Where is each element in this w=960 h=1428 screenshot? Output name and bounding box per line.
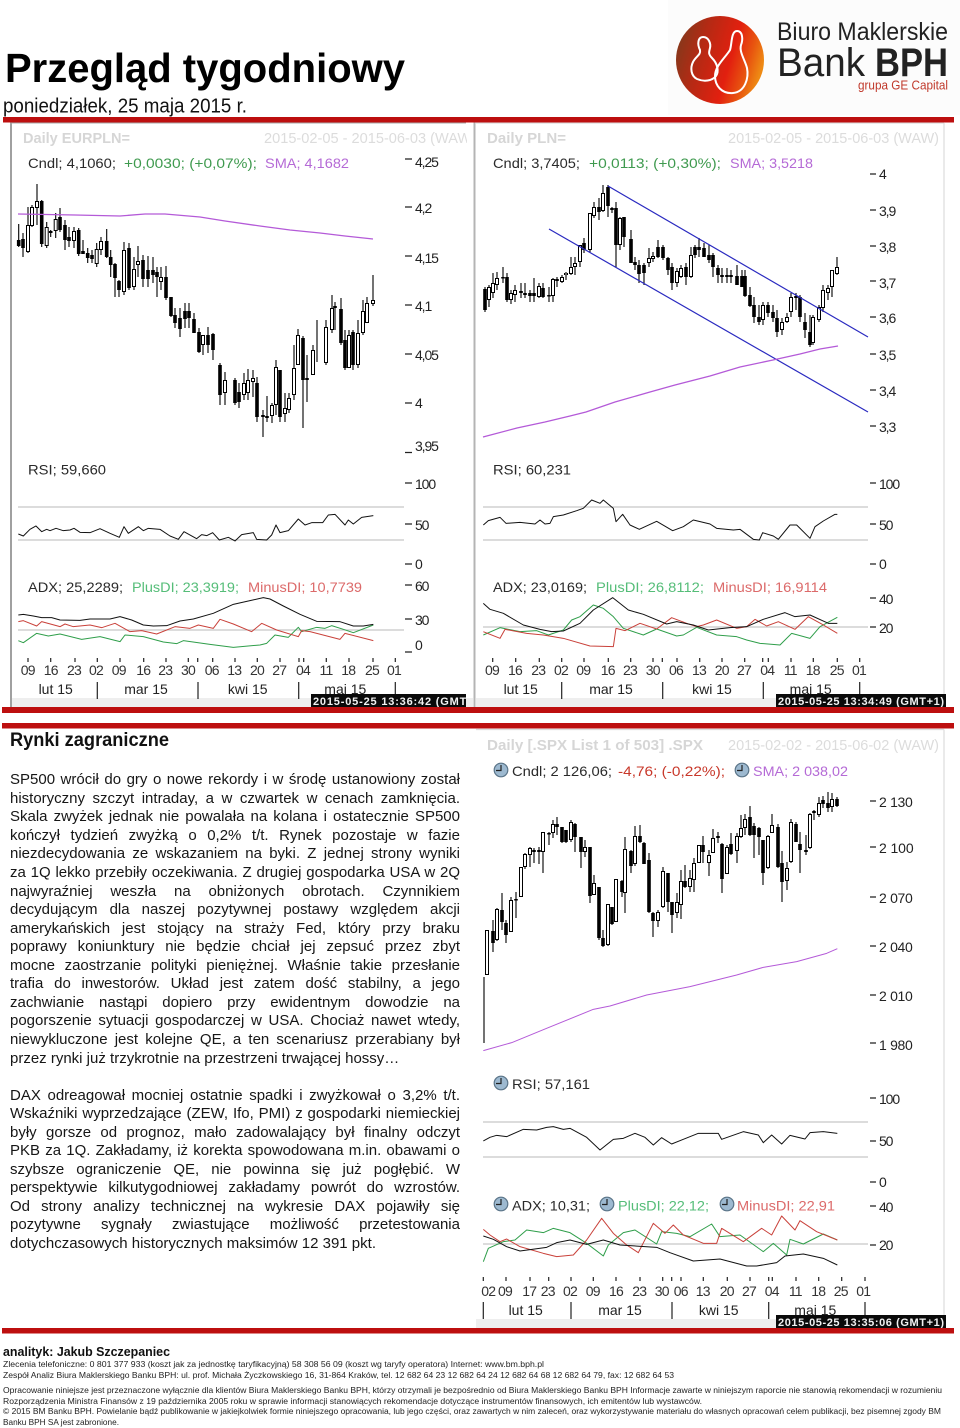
time axis: lut 15 bbox=[39, 681, 73, 697]
panel: PLN chart bbox=[476, 122, 946, 708]
y axis labels bbox=[870, 794, 914, 1253]
legend: price: Cndl; 4,1060; bbox=[28, 155, 116, 171]
text block: SP500 commentary: zachwianie nastąpi dopiero przy ewidentnym dowodzie na bbox=[10, 994, 460, 1011]
y axis labels: 20 bbox=[879, 620, 894, 636]
text block: DAX commentary: Wskaźniki wyprzedzające (ZEW, Ifo, PMI) z gospodarki niemieckiej bbox=[10, 1105, 460, 1122]
time axis: kwi 15 bbox=[228, 681, 268, 697]
time axis: 09 bbox=[21, 662, 36, 678]
time axis: 06 bbox=[674, 1283, 689, 1299]
time axis: 20 bbox=[720, 1283, 735, 1299]
time axis: 20 bbox=[250, 662, 265, 678]
time axis: maj 15 bbox=[790, 681, 832, 697]
y axis labels: 50 bbox=[879, 517, 894, 533]
time axis bbox=[485, 658, 867, 699]
time axis: 30 bbox=[655, 1283, 670, 1299]
time axis: kwi 15 bbox=[699, 1302, 739, 1318]
time axis: 13 bbox=[227, 662, 242, 678]
legend: price: Cndl; 2 126,06; bbox=[512, 763, 612, 779]
time axis: 16 bbox=[609, 1283, 624, 1299]
y axis labels: 20 bbox=[879, 1237, 894, 1253]
logo: Biuro Maklerskie Bank BPH: Biuro Maklerskie bbox=[777, 18, 948, 46]
RSI panel bbox=[483, 1076, 868, 1157]
text block: SP500 commentary: trafia do inwestorów. Układ jest zatem dość stabilny, a jego bbox=[10, 975, 460, 992]
time axis: 16 bbox=[136, 662, 151, 678]
ADX panel: ADX; 25,2289; bbox=[28, 579, 123, 595]
text block: SP500 commentary: pogorszenie sytuacji gospodarczej w USA. Chociaż nawet wtedy, bbox=[10, 1012, 460, 1029]
y axis labels: 4,15 bbox=[415, 250, 439, 266]
red divider top bbox=[3, 117, 954, 122]
text block: SP500 commentary: amerykańskich jest stojący na straży Fed, który przy braku bbox=[10, 920, 460, 937]
time axis: 23 bbox=[158, 662, 173, 678]
y axis labels: 0 bbox=[415, 637, 423, 653]
candlestick chart bbox=[18, 184, 373, 437]
text block: SP500 commentary: najwyraźniej weszła na obniżonych obrotach. Czynnikiem bbox=[10, 883, 460, 900]
chart header: 2015-02-05 - 2015-06-03 (WAW) bbox=[264, 131, 476, 147]
y axis labels: 2 040 bbox=[879, 939, 913, 955]
panel: SPX chart bbox=[476, 730, 946, 1329]
legend: price bbox=[493, 155, 813, 171]
time axis: 27 bbox=[737, 662, 752, 678]
time axis: 27 bbox=[272, 662, 287, 678]
time axis: 09 bbox=[112, 662, 127, 678]
red divider bottom bbox=[2, 1328, 954, 1334]
time axis: 09 bbox=[586, 1283, 601, 1299]
ADX panel: PlusDI; 23,3919; bbox=[132, 579, 239, 595]
time axis: 04 bbox=[765, 1283, 780, 1299]
time axis: 25 bbox=[834, 1283, 849, 1299]
title: Przegląd tygodniowy bbox=[5, 45, 405, 91]
time axis: 06 bbox=[205, 662, 220, 678]
time axis: 23 bbox=[623, 662, 638, 678]
text block: SP500 commentary: niewykluczone jest kolejne QE, a ten scenariusz przerabiany był bbox=[10, 1031, 460, 1048]
time axis: lut 15 bbox=[504, 681, 538, 697]
disclaimer: © 2015 BM Banku BPH. Powielanie bądź publikowanie w jakiejkolwiek formie niniejszego opracowania, lub jego części, oraz zawartych w nim zaleceń, oraz wykorzystywanie materiału do własnych opracowań celem publikacji, bez pisemnej zgody BM bbox=[3, 1406, 941, 1416]
time axis: 09 bbox=[576, 662, 591, 678]
RSI panel: RSI; 60,231 bbox=[493, 462, 571, 478]
time axis: lut 15 bbox=[509, 1302, 543, 1318]
text block: SP500 commentary: historyczny szczyt intraday, a w czwartek w cenach zamknięcia. bbox=[10, 790, 460, 807]
y axis labels bbox=[870, 166, 900, 636]
red divider middle lower bbox=[2, 723, 954, 728]
time axis: 27 bbox=[742, 1283, 757, 1299]
text block: SP500 commentary: za 1Q lekko przebiły oczekiwania. Z drugiej gospodarka USA w 2Q bbox=[10, 864, 460, 881]
text block: SP500 commentary: Skala zwyżek jednak nie powalała na kolana i ostatecznie SP500 bbox=[10, 808, 460, 825]
date subtitle: poniedziałek, 25 maja 2015 r. bbox=[3, 96, 247, 118]
text block: DAX commentary: Od strony analizy technicznej na wykresie DAX pojawiły się bbox=[10, 1198, 460, 1215]
time axis: 16 bbox=[601, 662, 616, 678]
y axis labels: 2 010 bbox=[879, 988, 913, 1004]
y axis labels: 2 070 bbox=[879, 890, 913, 906]
text block: SP500 commentary: poprawy koniunktury nie będzie chciał jej zepsuć przez zbyt bbox=[10, 938, 460, 955]
RSI panel bbox=[483, 462, 868, 540]
time axis: 23 bbox=[632, 1283, 647, 1299]
text block: DAX commentary: PKB za 1Q. Zakładamy, iż korekta spowodowana m.in. obawami o bbox=[10, 1142, 460, 1159]
y axis labels: 100 bbox=[879, 1091, 900, 1107]
y axis labels: 4,2 bbox=[415, 200, 432, 216]
y axis labels: 50 bbox=[415, 517, 430, 533]
red divider middle upper bbox=[2, 707, 954, 713]
ADX panel bbox=[483, 1197, 868, 1266]
legend: price: Cndl; 3,7405; bbox=[493, 155, 580, 171]
time axis: 18 bbox=[341, 662, 356, 678]
time axis: kwi 15 bbox=[692, 681, 732, 697]
y axis labels: 3,4 bbox=[879, 383, 896, 399]
time axis: 11 bbox=[320, 662, 333, 678]
time axis: 20 bbox=[715, 662, 730, 678]
legend: price: +0,0113; (+0,30%); bbox=[589, 155, 721, 171]
y axis labels: 3,3 bbox=[879, 419, 896, 435]
time axis: 16 bbox=[44, 662, 59, 678]
text block: SP500 commentary: SP500 wrócił do gry o nowe rekordy i w środę ustanowiony został bbox=[10, 771, 460, 788]
legend: price: SMA; 3,5218 bbox=[730, 155, 813, 171]
time axis: 02 bbox=[554, 662, 569, 678]
y axis labels: 3,6 bbox=[879, 310, 896, 326]
time axis: 18 bbox=[806, 662, 821, 678]
time axis: mar 15 bbox=[589, 681, 633, 697]
y axis labels: 100 bbox=[415, 476, 436, 492]
ADX panel: ADX; 23,0169; bbox=[493, 579, 587, 595]
logo: Biuro Maklerskie Bank BPH bbox=[668, 0, 960, 115]
time axis: mar 15 bbox=[598, 1302, 642, 1318]
time axis: 02 bbox=[481, 1283, 496, 1299]
disclaimer: Opracowanie niniejsze jest przeznaczone wyłącznie dla klientów Biura Maklerskiego Banku BPH, którzy otrzymali je bezpośrednio od Biura Maklerskiego Banku BPH Informacje zawarte w niniejszym raporcie nie stanowią rekomendacji w rozumieniu bbox=[3, 1385, 942, 1395]
chart header bbox=[487, 738, 939, 754]
legend: price: +0,0030; (+0,07%); bbox=[124, 155, 257, 171]
RSI panel: RSI; 57,161 bbox=[512, 1076, 590, 1092]
y axis labels: 4 bbox=[879, 166, 887, 182]
candlestick chart with channel bbox=[483, 185, 868, 437]
time axis: 30 bbox=[646, 662, 661, 678]
ADX panel: MinusDI; 16,9114 bbox=[713, 579, 827, 595]
text block: SP500 commentary: decydującym dla naszej pozytywnej postawy względem akcji bbox=[10, 901, 460, 918]
text block: DAX commentary: DAX odreagował mocniej ostatnie spadki i zwyżkował o 3,2% t/t. bbox=[10, 1086, 460, 1104]
logo: Biuro Maklerskie Bank BPH: grupa GE Capital bbox=[858, 78, 948, 92]
time axis: 02 bbox=[563, 1283, 578, 1299]
disclaimer bbox=[3, 1385, 942, 1427]
disclaimer: Rozporządzenia Ministra Finansów z 19 października 2005 roku w sprawie informacji stanowiących rekomendacje dotyczące instrumentów finansowych, ich emitentów lub wystawców. bbox=[3, 1396, 702, 1406]
logo: Biuro Maklerskie Bank BPH: Bank bbox=[777, 41, 866, 85]
RSI panel: RSI; 59,660 bbox=[28, 462, 106, 478]
time axis: 02 bbox=[89, 662, 104, 678]
text block: DAX commentary: były gorsze od prognoz, mało zadowalający był finalny odczyt bbox=[10, 1124, 460, 1141]
contact details: Zespół Analiz Biura Maklerskiego Banku BPH: ul. prof. Michała Życzkowskiego 16, 31-864 Kraków, tel. 12 682 64 23 12 682 64 24 12 682 64 68 12 682 64 79, fax: 12 682 64 53 bbox=[3, 1370, 674, 1380]
candlestick chart bbox=[483, 792, 837, 1051]
legend: price: SMA; 4,1682 bbox=[265, 155, 349, 171]
time axis: 23 bbox=[531, 662, 546, 678]
time axis: 23 bbox=[541, 1283, 556, 1299]
text block: DAX commentary bbox=[10, 1086, 460, 1252]
text block: DAX commentary: dotychczasowych historycznych maksimów 12 391 pkt. bbox=[10, 1235, 376, 1252]
legend: price: -4,76; (-0,22%); bbox=[618, 763, 725, 779]
y axis labels: 60 bbox=[415, 578, 430, 594]
ADX panel: ADX; 10,31; bbox=[512, 1198, 590, 1214]
y axis labels bbox=[405, 154, 439, 653]
y axis labels: 3,95 bbox=[415, 438, 439, 454]
time axis: maj 15 bbox=[794, 1302, 837, 1318]
text block: SP500 commentary: kończył tydzień zwyżką o 0,2% t/t. Rynek pozostaje w fazie bbox=[10, 827, 460, 844]
time axis: 01 bbox=[387, 662, 402, 678]
y axis labels: 30 bbox=[415, 612, 430, 628]
chart header bbox=[23, 131, 476, 147]
panel: EURPLN chart bbox=[10, 122, 485, 708]
time axis: 13 bbox=[696, 1283, 711, 1299]
timestamp: 2015-05-25 13:35:06 (GMT+1) bbox=[778, 1317, 944, 1329]
chart header: 2015-02-02 - 2015-06-02 (WAW) bbox=[728, 738, 939, 754]
y axis labels: 4,05 bbox=[415, 347, 439, 363]
y axis labels: 0 bbox=[879, 1174, 887, 1190]
y axis labels: 50 bbox=[879, 1133, 894, 1149]
y axis labels: 3,7 bbox=[879, 275, 896, 291]
contact details: Zlecenia telefoniczne: 0 801 377 933 (koszt jak za jednostkę taryfikacyjną) 58 308 56 09 (koszt wg taryfy operatora) Internet: www.bm.bph.pl bbox=[3, 1359, 544, 1369]
disclaimer: Banku BPH SA jest zabronione. bbox=[3, 1417, 119, 1427]
y axis labels: 3,9 bbox=[879, 203, 896, 219]
text block: SP500 commentary: mocne zaostrzanie polityki pieniężnej. Właśnie takie przesłanie bbox=[10, 957, 460, 974]
heading: Rynki zagraniczne: Rynki zagraniczne bbox=[10, 730, 169, 751]
ADX panel: MinusDI; 10,7739 bbox=[248, 579, 362, 595]
time axis: 13 bbox=[692, 662, 707, 678]
text block: SP500 commentary bbox=[10, 771, 460, 1066]
y axis labels: 2 130 bbox=[879, 794, 913, 810]
chart header: 2015-02-05 - 2015-06-03 (WAW) bbox=[728, 131, 939, 147]
legend: price bbox=[494, 763, 848, 779]
time axis: 25 bbox=[830, 662, 845, 678]
y axis labels: 4,25 bbox=[415, 154, 439, 170]
time axis: 06 bbox=[669, 662, 684, 678]
time axis: 09 bbox=[485, 662, 500, 678]
ADX panel: MinusDI; 22,91 bbox=[737, 1198, 835, 1214]
timestamp: 2015-05-25 13:36:42 (GMT+1) bbox=[313, 696, 485, 708]
ADX panel bbox=[483, 579, 868, 647]
time axis: 17 bbox=[522, 1283, 537, 1299]
RSI panel bbox=[18, 462, 404, 541]
y axis labels: 3,5 bbox=[879, 347, 896, 363]
ADX panel: PlusDI; 22,12; bbox=[618, 1198, 709, 1214]
time axis: 04 bbox=[760, 662, 775, 678]
y axis labels: 100 bbox=[879, 476, 900, 492]
y axis labels: 0 bbox=[879, 556, 887, 572]
time axis: 25 bbox=[365, 662, 380, 678]
time axis: 01 bbox=[856, 1283, 871, 1299]
time axis: maj 15 bbox=[324, 681, 367, 697]
time axis: 18 bbox=[811, 1283, 826, 1299]
time axis bbox=[481, 1277, 871, 1319]
time axis: 01 bbox=[852, 662, 867, 678]
text block: DAX commentary: szybsze ograniczenie QE, nie powinna się już pogłębić. W bbox=[10, 1161, 460, 1178]
time axis: 16 bbox=[508, 662, 523, 678]
chart header: Daily EURPLN= bbox=[23, 131, 130, 147]
text block: SP500 commentary: przez rynki już trzykrotnie na przestrzeni trwającej hossy… bbox=[10, 1050, 399, 1066]
time axis: 11 bbox=[784, 662, 798, 678]
chart header bbox=[487, 131, 939, 147]
time axis: 11 bbox=[789, 1283, 803, 1299]
y axis labels: 3,8 bbox=[879, 239, 896, 255]
time axis: 09 bbox=[498, 1283, 513, 1299]
time axis: mar 15 bbox=[124, 681, 168, 697]
y axis labels: 4,1 bbox=[415, 298, 432, 314]
y axis labels: 40 bbox=[879, 1199, 894, 1215]
y axis labels: 1 980 bbox=[879, 1037, 913, 1053]
time axis: 04 bbox=[296, 662, 311, 678]
time axis bbox=[21, 658, 402, 699]
text block: DAX commentary: perspektywie kilkutygodniowej zakładamy powrót do wzrostów. bbox=[10, 1179, 460, 1196]
ADX panel: PlusDI; 26,8112; bbox=[596, 579, 704, 595]
chart header: Daily [.SPX List 1 of 503] .SPX bbox=[487, 738, 703, 754]
logo: Biuro Maklerskie Bank BPH: BPH bbox=[875, 41, 948, 85]
contact details bbox=[3, 1359, 674, 1380]
y axis labels: 2 100 bbox=[879, 840, 914, 856]
text block: SP500 commentary: niezdecydowania ze wskazaniem na byki. Z jednej strony wyniki bbox=[10, 845, 460, 862]
analyst name: analityk: Jakub Szczepaniec bbox=[3, 1344, 170, 1359]
legend: price bbox=[28, 155, 349, 171]
timestamp: 2015-05-25 13:34:49 (GMT+1) bbox=[778, 696, 944, 708]
chart header: Daily PLN= bbox=[487, 131, 566, 147]
text block: DAX commentary: pozytywne sygnały zwiastujące możliwość przetestowania bbox=[10, 1216, 460, 1233]
y axis labels: 40 bbox=[879, 591, 894, 607]
y axis labels: 0 bbox=[415, 556, 423, 572]
time axis: 23 bbox=[67, 662, 82, 678]
ADX panel bbox=[18, 579, 404, 647]
y axis labels: 4 bbox=[415, 395, 423, 411]
time axis: 30 bbox=[181, 662, 196, 678]
legend: price: SMA; 2 038,02 bbox=[753, 763, 848, 779]
